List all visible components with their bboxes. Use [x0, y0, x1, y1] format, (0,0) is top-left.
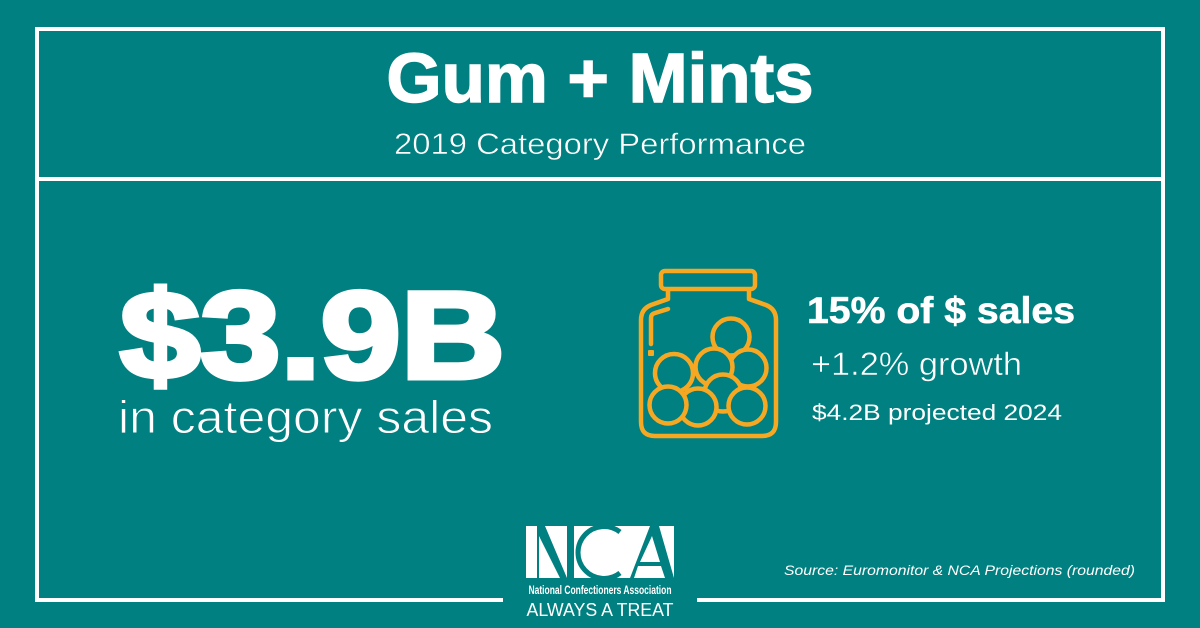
subtitle: 2019 Category Performance — [394, 128, 806, 161]
icon: candy jar — [641, 271, 776, 436]
growth: +1.2% growth — [811, 346, 1022, 382]
projection: $4.2B projected 2024 — [812, 400, 1062, 425]
logo tagline: always a treat: ALWAYS A TREAT — [526, 600, 674, 620]
sales label: in category sales — [118, 391, 493, 443]
panel: share stats — [807, 290, 1075, 425]
logo: NCA — [526, 526, 674, 620]
logo tagline: organisation: National Confectioners Association — [528, 585, 672, 597]
title: Gum + Mints — [386, 39, 814, 117]
big number: $3.9B — [120, 267, 505, 405]
panel: category sales — [118, 267, 505, 443]
source note: Source: Euromonitor & NCA Projections (rounded) — [784, 563, 1135, 578]
share of sales: 15% of $ sales — [807, 290, 1075, 331]
